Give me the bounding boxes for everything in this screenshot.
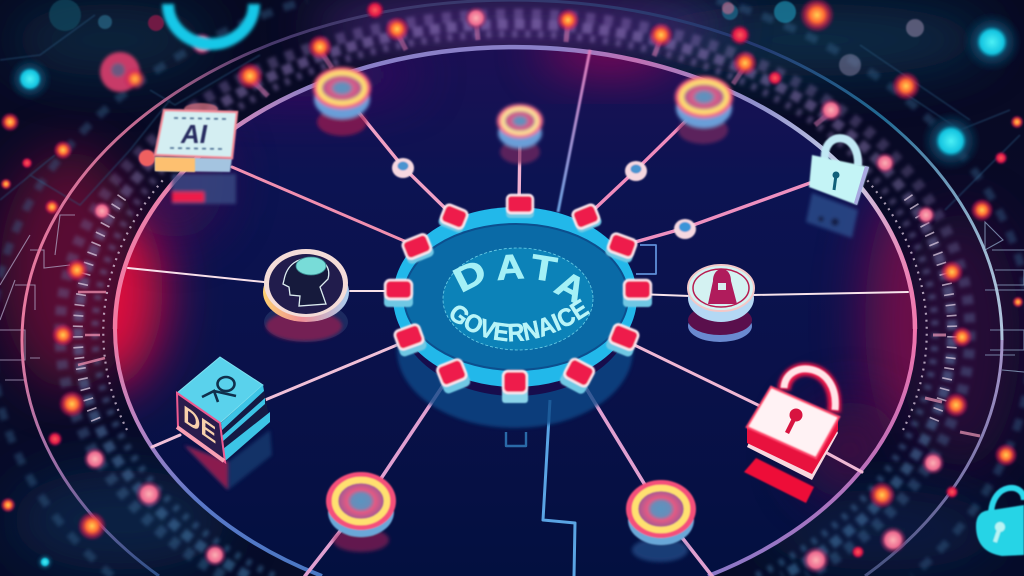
hub nodes <box>384 195 652 403</box>
icon: data cube stack <box>177 357 272 490</box>
icon: upper padlock <box>806 138 869 238</box>
icon: shield lock badge <box>688 265 754 342</box>
line: top-right node <box>585 115 692 218</box>
title: DATA: D <box>447 252 493 300</box>
blurred pink blob top left <box>100 52 146 92</box>
line: bottom-right node <box>578 375 712 576</box>
node: bottom-left ring <box>326 472 396 552</box>
node: top-left ring <box>313 67 371 136</box>
icon: AI chip <box>139 103 237 204</box>
line: red lock <box>624 340 862 472</box>
padlock reflection <box>806 193 858 238</box>
line: upper lock <box>621 183 810 246</box>
hub outer ring <box>393 207 637 387</box>
line: data cube <box>152 340 409 447</box>
node: top-right ring <box>675 76 733 144</box>
title: DATA: A <box>549 262 593 311</box>
inner circle panel <box>112 44 918 576</box>
icon: cyan arc top left <box>168 4 254 44</box>
title: DATA: T <box>528 248 560 290</box>
icon: red padlock <box>744 369 839 503</box>
small junction nodes <box>392 158 696 239</box>
circuit traces in blue <box>506 50 656 576</box>
hub lighter centre <box>443 248 593 350</box>
icon: brain head badge <box>263 249 349 342</box>
node: bottom-right ring <box>626 480 696 562</box>
label: DE: DE <box>183 399 216 450</box>
line: shield badge <box>637 292 908 296</box>
cube reflection <box>184 430 272 490</box>
network traces in the corners <box>0 15 1020 210</box>
line: brain badge <box>128 268 398 291</box>
brain <box>296 257 326 275</box>
crisp side ticks and circuit boxes <box>0 180 1024 436</box>
title: DATA: A <box>495 247 525 288</box>
icon: cyan padlock bottom right <box>976 488 1024 556</box>
line: top-left node <box>355 108 453 216</box>
line: AI chip to hub <box>232 167 416 246</box>
AI chip reflection <box>172 174 236 204</box>
central hub <box>394 207 636 430</box>
node: top ring <box>497 104 543 164</box>
title: DATA <box>447 247 593 311</box>
connector lines <box>128 108 908 576</box>
head silhouette <box>283 258 329 306</box>
dot stems <box>250 20 831 125</box>
red padlock reflection <box>744 458 814 503</box>
label: AI: AI <box>180 119 208 149</box>
hub inner disc <box>404 224 628 370</box>
line: bottom-left node <box>305 372 452 576</box>
hub reflection <box>397 272 633 428</box>
hub shadow band <box>395 212 635 396</box>
line: top node <box>519 135 520 204</box>
title: GOVERNANCE: GOVERNAICE <box>450 298 590 342</box>
